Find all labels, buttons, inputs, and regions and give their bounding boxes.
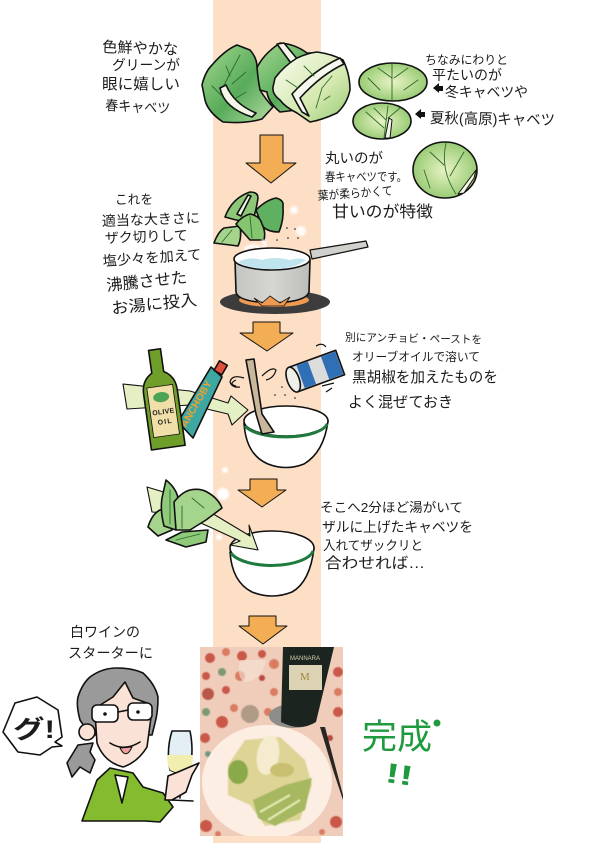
icon: second bowl bbox=[230, 531, 314, 596]
text: white wine starter: 白ワインの bbox=[70, 624, 140, 640]
text: flat cabbages note: 冬キャベツや bbox=[445, 84, 528, 100]
arrow: step 4 bbox=[239, 616, 287, 644]
text: complete bbox=[362, 718, 440, 792]
arrow: ingredients into bowl bbox=[123, 384, 248, 425]
icon: anchovy tube bbox=[178, 361, 227, 438]
text: fresh green: 春キャベツ bbox=[105, 97, 171, 116]
icon: flat summer cabbage bbox=[353, 103, 411, 139]
icon: steam and salt bbox=[244, 206, 306, 250]
text: chop and boil: お湯に投入 bbox=[111, 291, 198, 318]
text: chop and boil: ザク切りして bbox=[105, 227, 188, 246]
icon: chopped leaves bbox=[214, 192, 283, 246]
icon: round spring cabbage bbox=[413, 142, 477, 198]
icon: anchovy tube: ANCHOBY bbox=[179, 379, 215, 430]
icon: olive oil bottle: OIL bbox=[157, 418, 173, 427]
background strip bbox=[213, 0, 321, 843]
arrow: step 2 bbox=[240, 322, 293, 351]
icon: boiled leaves bbox=[148, 467, 229, 547]
text: white wine starter bbox=[68, 624, 153, 661]
text: round is spring cabbage: 丸いのが bbox=[325, 150, 383, 166]
icon: olive oil bottle bbox=[138, 347, 185, 450]
text: white wine starter: スターターに bbox=[68, 645, 153, 661]
text: add cabbage note bbox=[320, 500, 473, 572]
icon: motion marks bbox=[230, 344, 334, 392]
icon: olive oil bottle: OLIVE bbox=[152, 407, 175, 417]
photo: finished dish: MANNARA bbox=[290, 655, 321, 662]
text: chop and boil: 適当な大きさに bbox=[102, 210, 200, 229]
text: fresh green: 眼に嬉しい bbox=[102, 76, 180, 93]
icon: big spring cabbages bbox=[202, 43, 350, 123]
text: round is spring cabbage: 春キャベツです。 bbox=[325, 170, 407, 184]
text: fresh green: 色鮮やかな bbox=[102, 39, 178, 59]
text: complete: !! bbox=[383, 757, 415, 792]
text: anchovy note: よく混ぜておき bbox=[348, 394, 453, 411]
icon: pepper shaker bbox=[283, 350, 345, 394]
text: complete: 完成 bbox=[362, 718, 432, 757]
text: chop and boil: 塩少々を加えて bbox=[102, 246, 202, 269]
text: round is spring cabbage: 葉が柔らかくて bbox=[317, 183, 393, 203]
text: anchovy note: オリーブオイルで溶いて bbox=[352, 349, 480, 364]
text: chop and boil: 沸騰させた bbox=[106, 269, 188, 295]
photo: finished dish bbox=[200, 647, 343, 839]
icon: person with wine bbox=[67, 668, 199, 822]
text: flat cabbages note bbox=[425, 53, 555, 129]
arrow: pointer to winter cabbage bbox=[433, 83, 443, 93]
text: add cabbage note: 合わせれば… bbox=[325, 555, 425, 572]
arrow: step 3 bbox=[238, 479, 286, 507]
text: chop and boil bbox=[102, 192, 202, 318]
callout: speech bubble bbox=[3, 697, 62, 755]
text: add cabbage note: 入れてザックリと bbox=[323, 538, 423, 553]
arrow: cabbage into bowl bbox=[147, 487, 258, 550]
icon: pepper specks bbox=[274, 386, 296, 399]
text: fresh green bbox=[102, 39, 180, 116]
icon: boiling pot on burner bbox=[220, 241, 368, 314]
text: flat cabbages note: ちなみにわりと bbox=[425, 53, 508, 67]
arrow: step 1 bbox=[246, 135, 296, 183]
text: anchovy note bbox=[345, 331, 498, 411]
icon: flat winter cabbage bbox=[359, 63, 427, 101]
icon: mixing bowl with spoon bbox=[244, 359, 328, 468]
arrow: pointer to summer cabbage bbox=[415, 109, 425, 119]
text: flat cabbages note: 平たいのが bbox=[432, 67, 502, 83]
text: anchovy note: 黒胡椒を加えたものを bbox=[352, 369, 498, 386]
text: add cabbage note: ザルに上げたキャベツを bbox=[322, 519, 473, 535]
text: anchovy note: 別にアンチョビ・ペーストを bbox=[345, 331, 482, 346]
text: round is spring cabbage: 甘いのが特徴 bbox=[332, 203, 433, 221]
photo: finished dish: M bbox=[300, 671, 310, 683]
text: fresh green: グリーンが bbox=[112, 57, 180, 73]
text: add cabbage note: そこへ2分ほど湯がいて bbox=[320, 500, 463, 515]
text: chop and boil: これを bbox=[115, 192, 153, 207]
text: flat cabbages note: 夏秋(高原)キャベツ bbox=[430, 110, 555, 129]
callout: speech bubble: グ! bbox=[13, 715, 55, 744]
text: round is spring cabbage bbox=[317, 150, 433, 221]
